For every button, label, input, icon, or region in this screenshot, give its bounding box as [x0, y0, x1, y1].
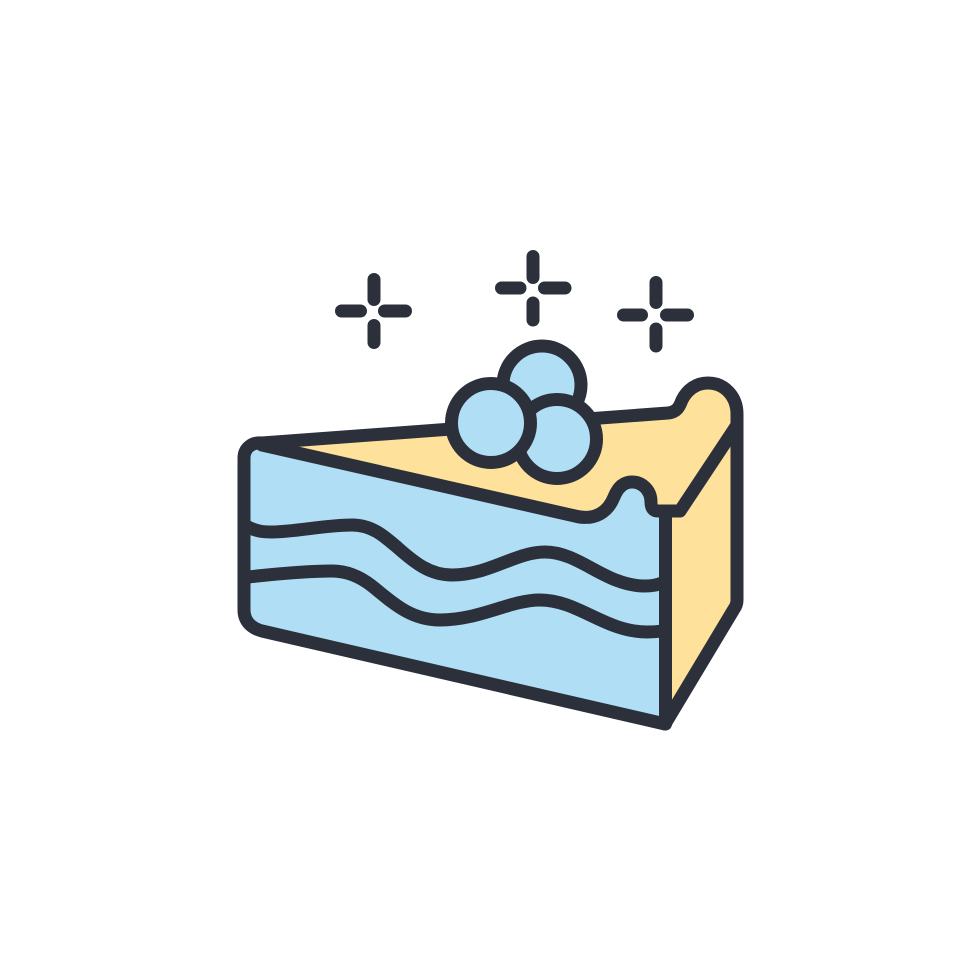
blueberry top — [503, 346, 581, 424]
blueberry right — [518, 400, 596, 478]
icon: sparkle left — [342, 280, 406, 342]
cake right side — [665, 425, 737, 722]
cake front face — [244, 443, 665, 724]
icon: sparkle centre — [502, 256, 565, 320]
cream wave lower — [248, 571, 662, 632]
cake top front edge — [262, 425, 737, 517]
blueberry left — [452, 384, 530, 462]
cake top — [262, 383, 737, 517]
cake vertical edge — [659, 511, 672, 724]
icon: sparkle right — [624, 282, 688, 346]
cream wave upper — [248, 525, 662, 586]
cake outline — [244, 383, 737, 724]
